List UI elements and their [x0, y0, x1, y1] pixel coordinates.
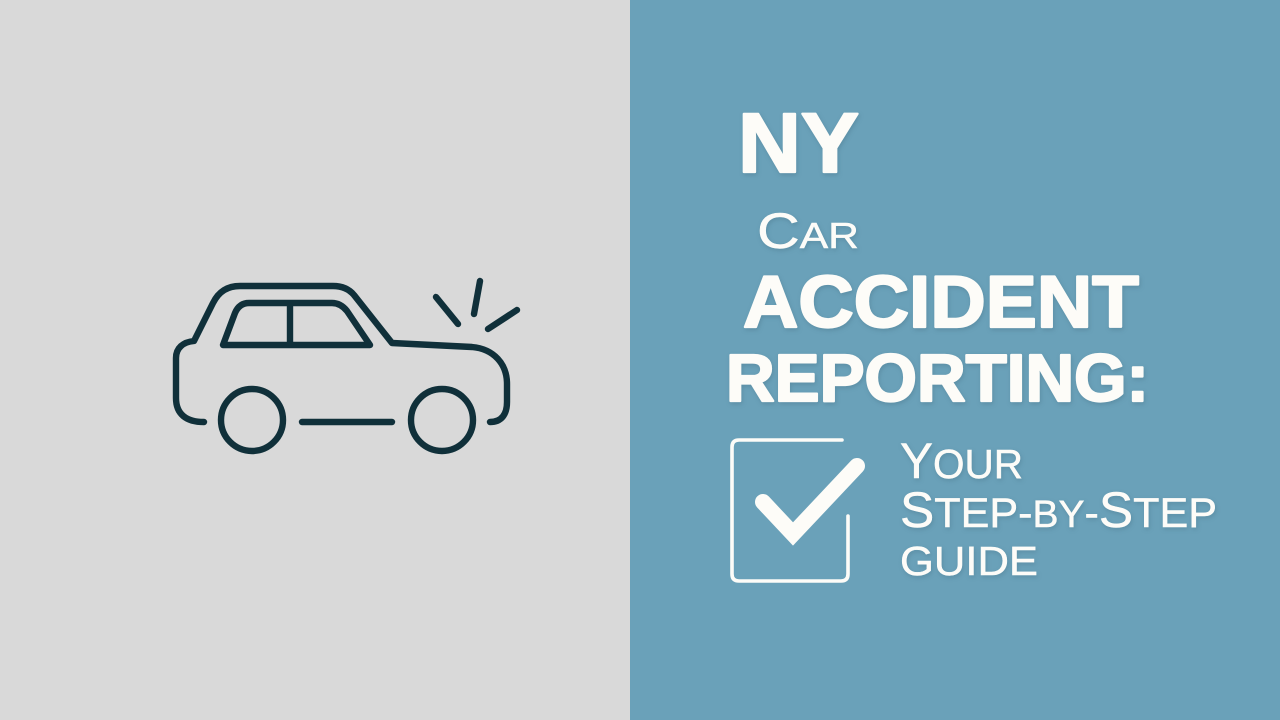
icon: checkbox with check mark	[732, 440, 857, 581]
checkbox outline	[732, 440, 848, 581]
car windows	[223, 303, 370, 345]
title: NY: NY	[738, 96, 859, 190]
subtitle: Step-by-Step: STEP-BY-STEP	[900, 482, 1217, 538]
icon: car with crash sparks	[176, 281, 517, 451]
subtitle: Your: YOUR	[900, 433, 1023, 489]
panel: left grey background	[0, 0, 630, 720]
title: Reporting: REPORTING:	[726, 341, 1149, 416]
impact sparks	[436, 281, 517, 329]
subtitle: Guide: GUIDE	[900, 538, 1038, 584]
title: Accident: ACCIDENT	[743, 262, 1139, 343]
underbody line	[302, 419, 392, 425]
panel: right blue background	[630, 0, 1280, 720]
car body outline	[176, 286, 507, 422]
rear wheel	[411, 389, 473, 451]
check mark	[763, 466, 857, 534]
front wheel	[221, 389, 283, 451]
title: Car: CAR	[757, 203, 859, 259]
